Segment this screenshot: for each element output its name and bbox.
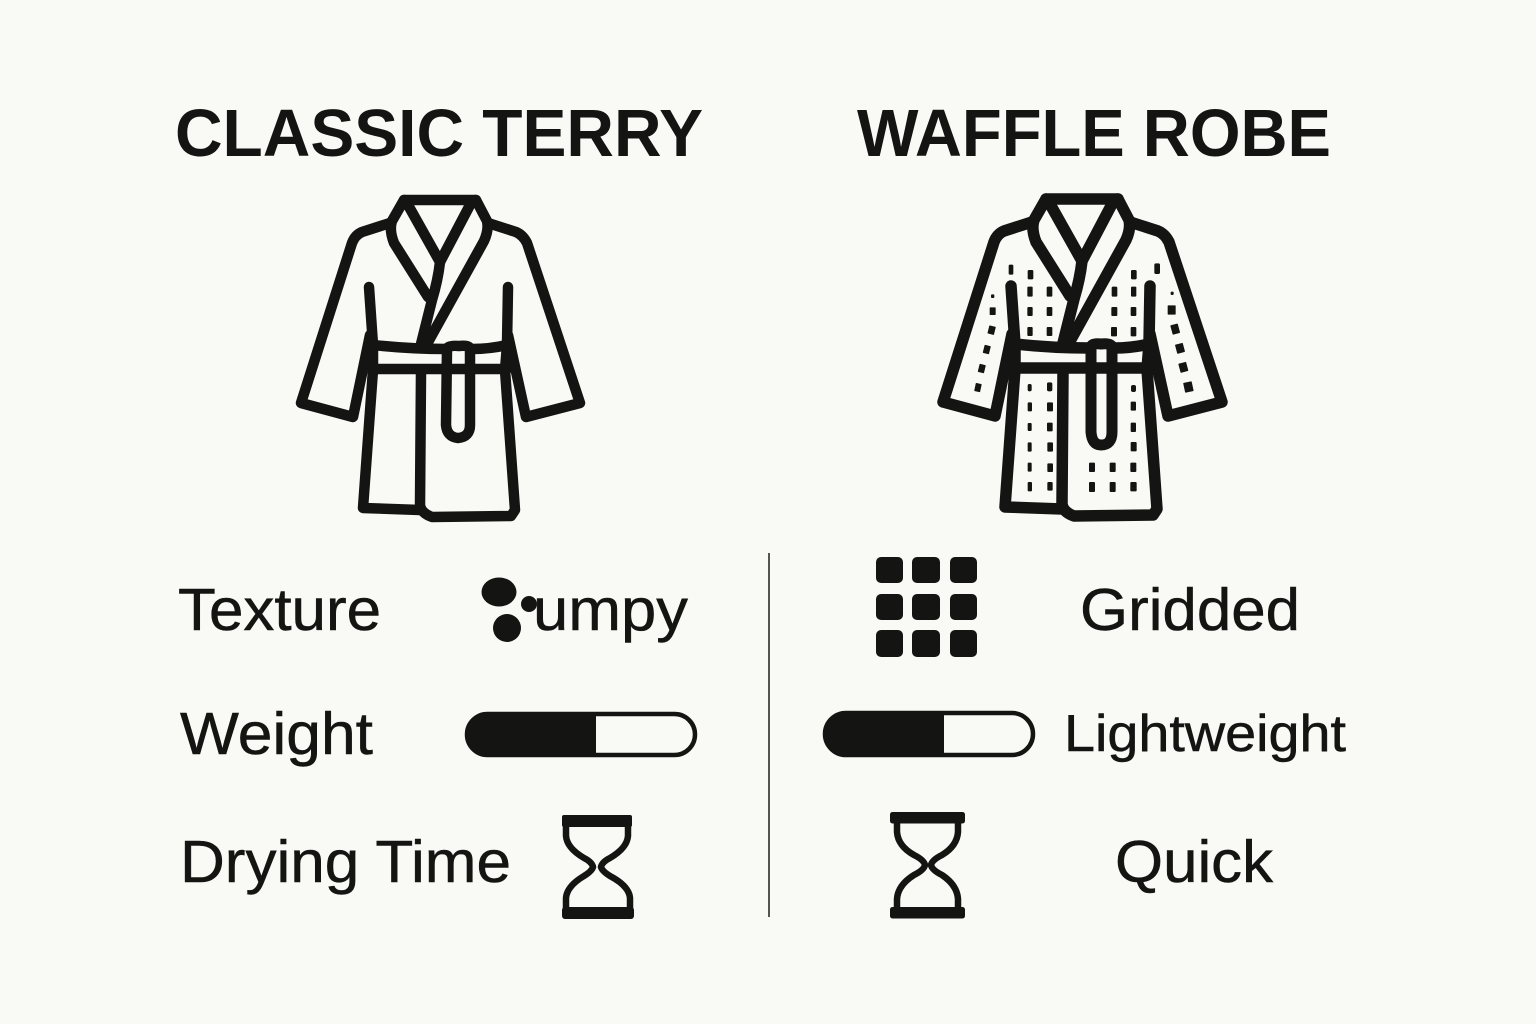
label: Weight: Weight bbox=[180, 701, 373, 767]
label: Drying Time: Drying Time bbox=[180, 829, 511, 895]
value: Gridded: Gridded bbox=[1080, 577, 1300, 643]
icon: waffle robe with dotted texture bbox=[943, 199, 1222, 516]
icon: hourglass, classic terry bbox=[562, 815, 634, 919]
icon: classic terry robe bbox=[301, 200, 580, 517]
meter: waffle robe weight bbox=[823, 711, 1033, 757]
meter: classic terry weight bbox=[465, 712, 695, 757]
value: Quick: Quick bbox=[1115, 829, 1274, 895]
center divider bbox=[768, 553, 770, 917]
icon: waffle grid bbox=[876, 557, 977, 657]
value: Lightweight: Lightweight bbox=[1064, 705, 1347, 763]
title: Classic Terry: CLASSIC TERRY bbox=[175, 96, 703, 171]
title: Waffle Robe: WAFFLE ROBE bbox=[857, 96, 1331, 171]
icon: hourglass, waffle robe bbox=[890, 812, 965, 918]
value: Bumpy with dot icon bbox=[482, 577, 689, 643]
value: Bumpy with dot icon: umpy bbox=[533, 577, 689, 643]
label: Texture: Texture bbox=[178, 577, 381, 643]
